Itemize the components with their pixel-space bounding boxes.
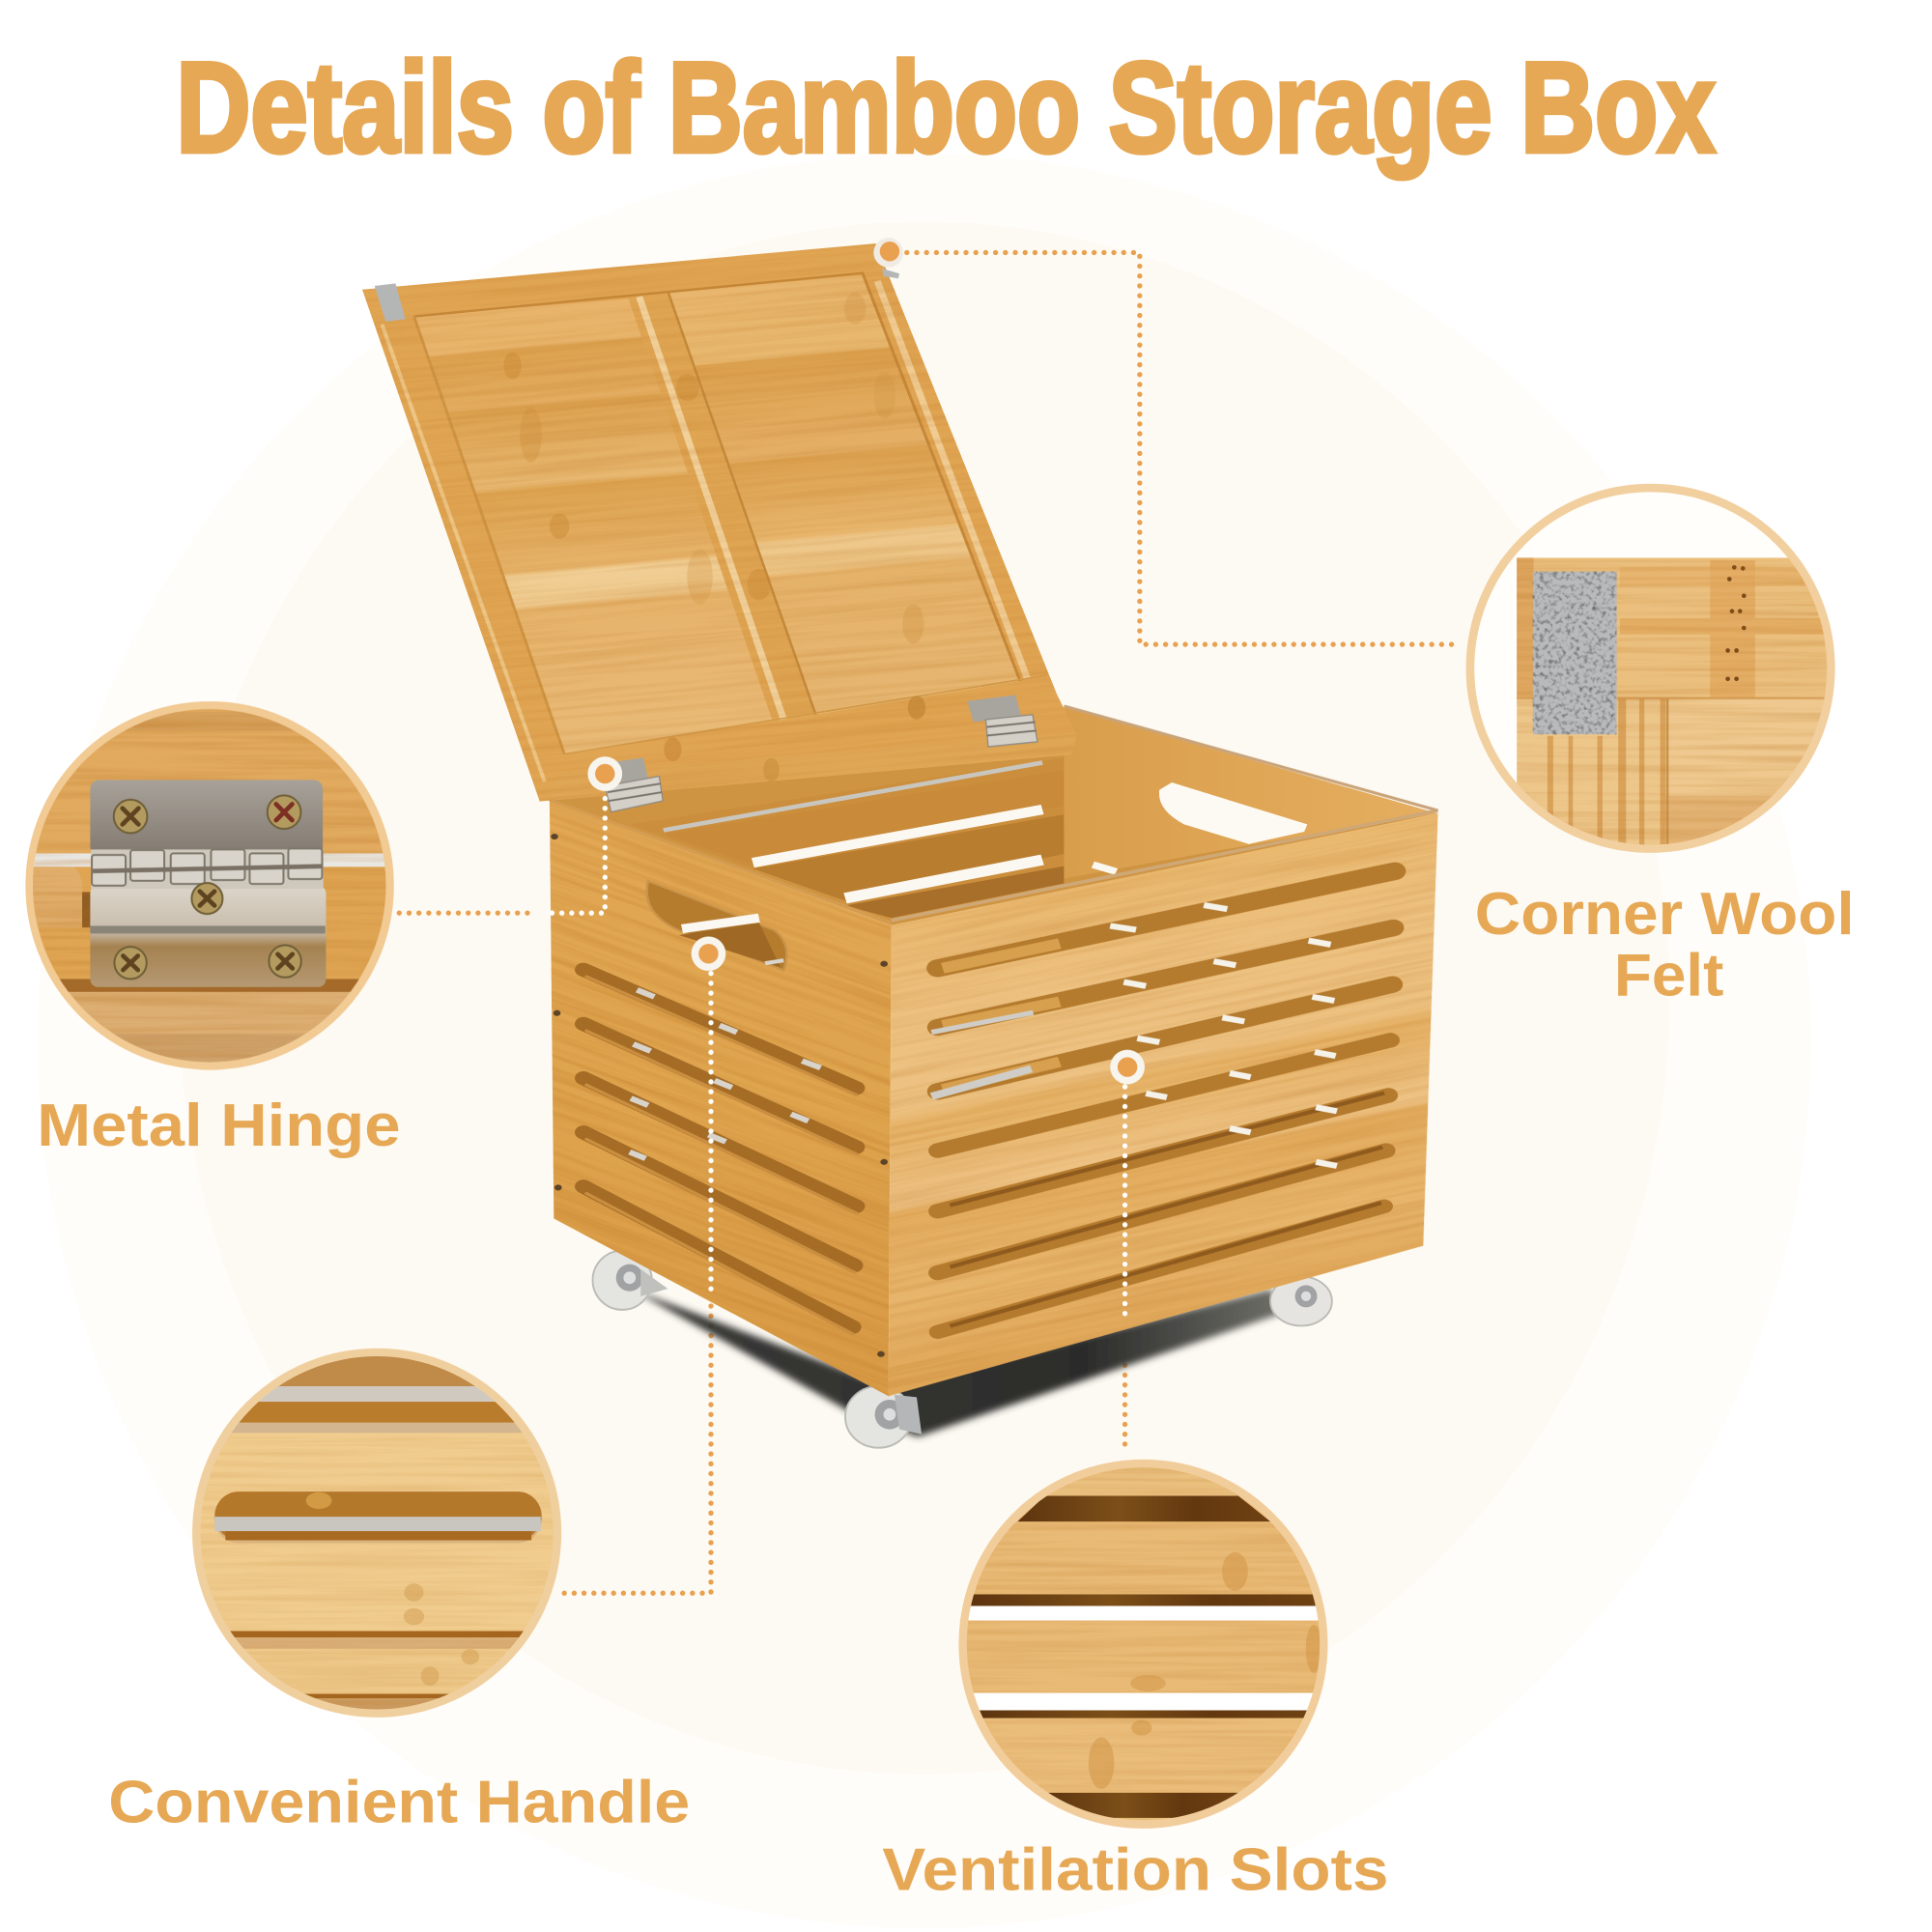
lid felt pads — [375, 269, 899, 322]
floor shadow — [631, 1289, 1282, 1436]
wheel: front — [845, 1386, 922, 1448]
lid — [192, 141, 1237, 919]
callout line: corner wool felt — [907, 252, 1454, 644]
detail circle: corner wool felt — [1470, 488, 1845, 860]
callout line: vent, on wood — [1122, 1087, 1127, 1319]
hinge: left — [605, 757, 663, 812]
marker: hinge — [587, 756, 622, 791]
callout line: convenient handle, outside — [562, 1306, 711, 1593]
left face — [549, 704, 1438, 1397]
label: ventilation slots: Ventilation Slots — [882, 1836, 1388, 1904]
label: corner wool felt: Felt — [1614, 942, 1724, 1009]
callout line: metal hinge, outside — [399, 911, 537, 915]
wheel: back left — [593, 1251, 668, 1310]
callout line: hinge, on wood — [552, 791, 605, 913]
wheel: back right — [1270, 1276, 1332, 1325]
detail circle: convenient handle — [184, 1352, 570, 1717]
detail circle: metal hinge — [19, 702, 406, 1079]
callout line: ventilation slots, outside — [1122, 1325, 1127, 1446]
label: convenient handle: Convenient Handle — [108, 1768, 690, 1835]
label: metal hinge: Metal Hinge — [37, 1092, 401, 1159]
marker: handle — [692, 936, 725, 971]
detail circle: ventilation slots — [952, 1463, 1338, 1830]
marker: vent — [1110, 1050, 1145, 1084]
label: corner wool felt: Corner Wool — [1475, 880, 1855, 948]
box — [362, 243, 1439, 1397]
label: corner wool felt — [1475, 880, 1855, 1009]
box top rims — [550, 706, 1438, 923]
marker: felt — [873, 238, 903, 268]
box interior — [550, 706, 1438, 925]
right face with ventilation slots — [889, 813, 1437, 1397]
callout line: handle, on wood — [709, 974, 713, 1298]
hinge: right — [967, 695, 1037, 747]
